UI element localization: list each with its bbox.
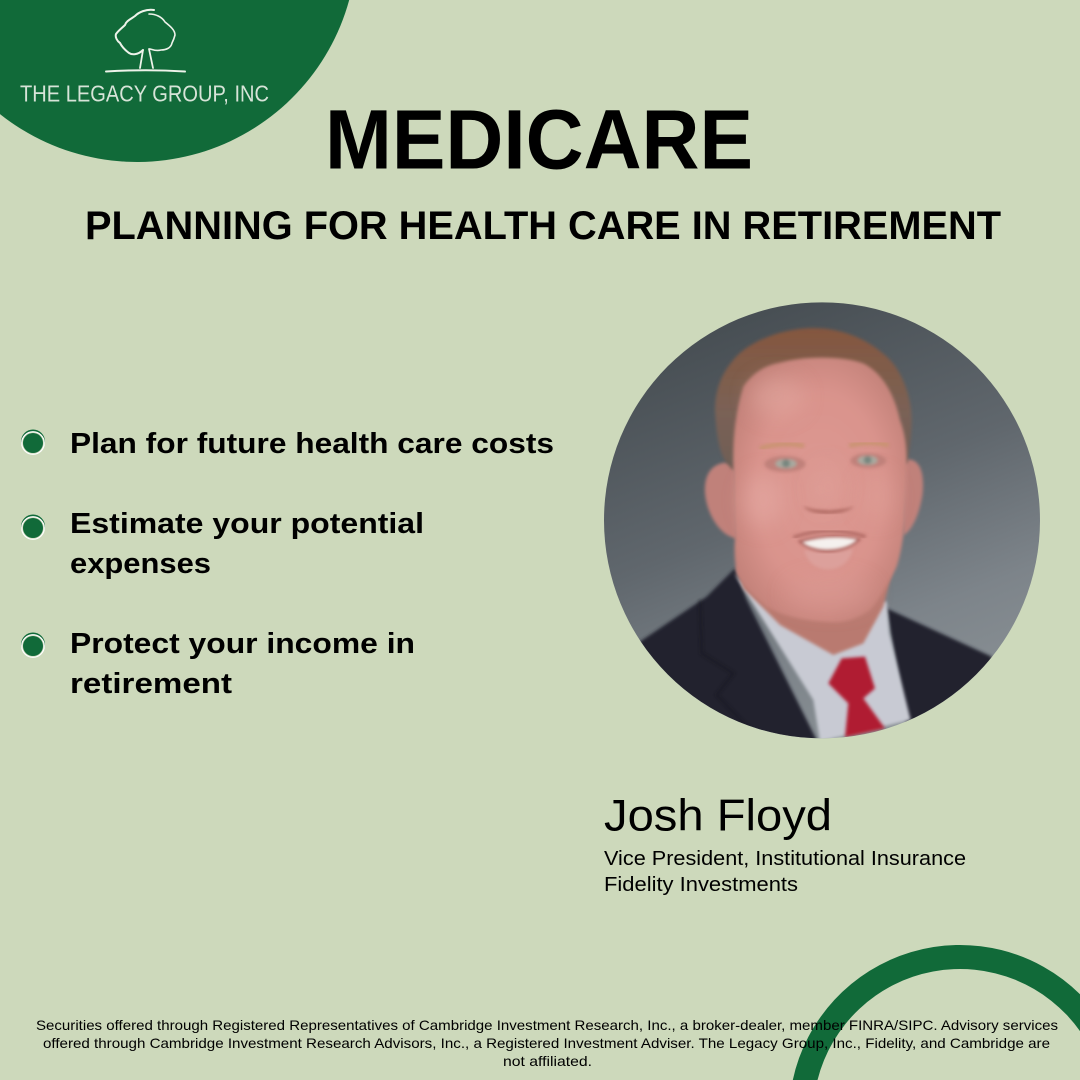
hair <box>715 328 912 470</box>
eyebrows <box>760 443 889 448</box>
subtitle: PLANNING FOR HEALTH CARE IN RETIREMENT <box>85 204 1001 248</box>
lapel shadow <box>698 599 747 725</box>
icon: tree <box>106 10 185 72</box>
logo badge <box>0 0 349 162</box>
speaker details <box>604 848 966 896</box>
jacket <box>633 568 992 747</box>
disclaimer: offered through Cambridge Investment Research Advisors, Inc., a Registered Investment Adviser. The Legacy Group, Inc., Fidelity, and Cambridge are <box>43 1036 1050 1051</box>
bullet: protect income <box>21 628 415 700</box>
speaker details: Fidelity Investments <box>604 874 798 896</box>
ears <box>705 459 923 538</box>
disclaimer <box>36 1018 1058 1069</box>
photo backdrop <box>600 300 1045 745</box>
tie <box>828 657 885 737</box>
bullet: estimate expenses: expenses <box>70 548 211 580</box>
shirt <box>734 573 911 742</box>
speaker details: Vice President, Institutional Insurance <box>604 848 966 870</box>
eyes <box>764 453 886 472</box>
neck <box>737 567 893 655</box>
bullet: estimate expenses <box>21 508 424 580</box>
face <box>733 358 907 622</box>
facial shading <box>744 378 794 520</box>
bullet: plan for future costs: Plan for future health care costs <box>70 428 554 460</box>
decorative ring <box>793 945 1080 1080</box>
logo wordmark: THE LEGACY GROUP, INC <box>20 80 269 106</box>
speaker name: Josh Floyd <box>604 792 832 841</box>
nose <box>804 506 852 514</box>
disclaimer: Securities offered through Registered Representatives of Cambridge Investment Research, Inc., a broker-dealer, member FINRA/SIPC. Advisory services <box>36 1018 1058 1033</box>
green corner circle <box>0 0 349 162</box>
bullet: protect income: Protect your income in <box>70 628 415 660</box>
bullet list <box>21 428 554 700</box>
disclaimer: not affiliated. <box>503 1054 592 1069</box>
portrait photo <box>600 300 1045 747</box>
title: MEDICARE <box>325 92 753 186</box>
mouth <box>793 531 866 569</box>
bullet: estimate expenses: Estimate your potential <box>70 508 424 540</box>
bullet: protect income: retirement <box>70 668 232 700</box>
